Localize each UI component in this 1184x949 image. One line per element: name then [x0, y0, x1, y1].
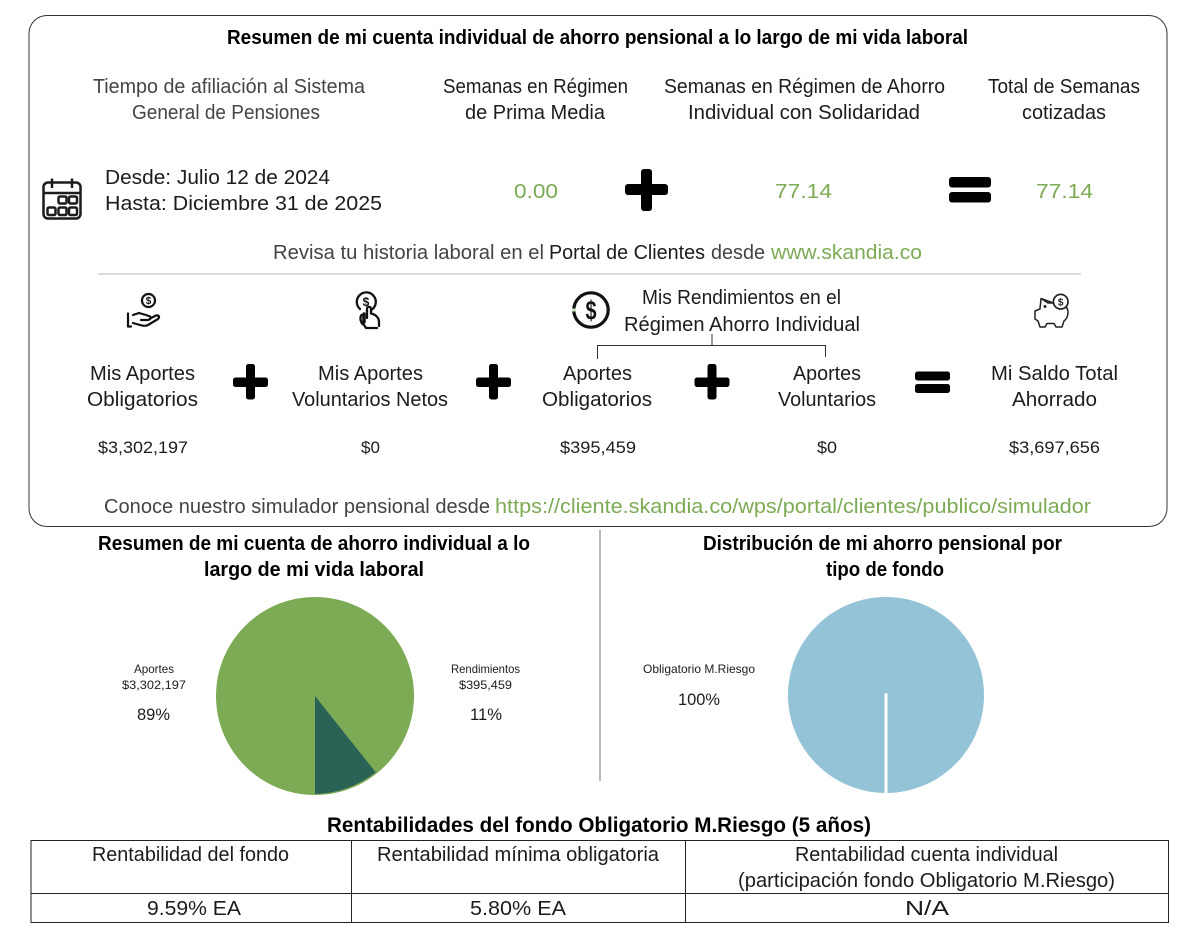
label: contributions [122, 662, 186, 724]
cell: individual account return: Rentabilidad cuenta individual [795, 844, 1058, 866]
text: individual savings weeks label: Semanas en Régimen de Ahorro [664, 76, 945, 98]
label: obligatory fund [643, 662, 755, 709]
column: returns on obligatory contributions: $395,459 [560, 438, 636, 457]
label: obligatory fund: 100% [678, 690, 720, 709]
heading: account summary: Resumen de mi cuenta individual de ahorro pensional a lo largo de mi vida laboral [227, 27, 968, 49]
heading: fund distribution: tipo de fondo [826, 559, 944, 581]
column: voluntary net contributions [292, 363, 448, 457]
heading: fund returns: Rentabilidades del fondo Obligatorio M.Riesgo (5 años) [327, 814, 871, 837]
text: affiliation dates: Desde: Julio 12 de 2024 [105, 167, 330, 189]
panel: fund distribution pie chart [643, 533, 1062, 794]
icon: finger with coin: $ [363, 295, 370, 309]
icon: plus [694, 364, 730, 400]
value: total weeks: 77.14 [1036, 181, 1093, 203]
column: total savings [991, 363, 1118, 457]
value: prima media weeks: 0.00 [514, 181, 558, 203]
cell: individual account return [738, 844, 1115, 920]
column: obligatory contributions: Obligatorios [87, 389, 198, 411]
text: affiliation time label: General de Pensiones [132, 102, 320, 124]
icon: plus [476, 364, 511, 400]
label: contributions: $3,302,197 [122, 678, 186, 692]
text: total weeks label [988, 76, 1140, 124]
column: returns on obligatory contributions: Obligatorios [542, 389, 652, 411]
icon: dollar circle [572, 293, 608, 327]
icon: calendar [44, 178, 80, 218]
icon: piggy bank [1035, 294, 1068, 327]
column: obligatory contributions: Mis Aportes [90, 363, 195, 385]
column: returns on voluntary contributions: Voluntarios [778, 389, 876, 411]
text: returns heading: Régimen Ahorro Individual [624, 314, 860, 336]
text: total weeks label: Total de Semanas [988, 76, 1140, 98]
text: simulator note: https://cliente.skandia.co/wps/portal/clientes/publico/simulador [495, 496, 1091, 518]
icon: hand with coin: $ [146, 296, 152, 307]
column: voluntary net contributions: Voluntarios Netos [292, 389, 448, 411]
text: client portal note [273, 242, 922, 264]
column: total savings: Ahorrado [1012, 389, 1097, 411]
value: individual savings weeks: 77.14 [775, 181, 832, 203]
text: affiliation time label [93, 76, 366, 124]
icon: hand with coin [128, 294, 159, 326]
text: simulator note: Conoce nuestro simulador pensional desde [104, 496, 490, 518]
panel: savings pie chart [98, 533, 530, 795]
heading: fund distribution: Distribución de mi ahorro pensional por [703, 533, 1062, 555]
text: total weeks label: cotizadas [1022, 102, 1106, 124]
heading: fund distribution [703, 533, 1062, 581]
cell: fund return [92, 844, 289, 920]
cell: fund return: 9.59% EA [147, 898, 242, 920]
column: voluntary net contributions: $0 [361, 438, 380, 457]
column: voluntary net contributions: Mis Aportes [318, 363, 423, 385]
text: simulator note [104, 496, 1091, 518]
text: client portal note: Revisa tu historia laboral en el [273, 242, 544, 264]
column: returns on voluntary contributions: Aportes [793, 363, 861, 385]
column: total savings: Mi Saldo Total [991, 363, 1118, 385]
icon: dollar circle: $ [586, 296, 596, 326]
heading: savings summary [98, 533, 530, 581]
pie chart: fund type [788, 597, 984, 794]
column: returns on voluntary contributions: $0 [817, 438, 837, 457]
icon: equals [949, 177, 991, 202]
icon: equals [915, 372, 950, 393]
bracket connector [598, 334, 826, 359]
text: client portal note: desde [711, 242, 765, 264]
cell: fund return: Rentabilidad del fondo [92, 844, 289, 866]
text: affiliation time label: Tiempo de afiliación al Sistema [93, 76, 366, 98]
text: returns heading [624, 287, 860, 336]
text: client portal note: Portal de Clientes [549, 242, 705, 264]
cell: minimum required return [377, 844, 660, 920]
label: contributions: 89% [137, 705, 170, 724]
icon: piggy bank: $ [1058, 298, 1064, 308]
text: affiliation dates: Hasta: Diciembre 31 de 2025 [105, 193, 382, 215]
text: individual savings weeks label [664, 76, 945, 124]
label: returns: $395,459 [459, 678, 512, 692]
column: returns on obligatory contributions: Aportes [563, 363, 632, 385]
icon: plus [625, 169, 668, 211]
heading: savings summary: Resumen de mi cuenta de ahorro individual a lo [98, 533, 530, 555]
column: obligatory contributions: $3,302,197 [98, 438, 188, 457]
text: client portal note: www.skandia.co [770, 242, 922, 264]
cell: minimum required return: Rentabilidad mínima obligatoria [377, 844, 660, 866]
text: returns heading: Mis Rendimientos en el [642, 287, 841, 309]
pie chart: contributions and returns [216, 597, 414, 795]
text: individual savings weeks label: Individual con Solidaridad [688, 102, 920, 124]
table: fund returns [31, 840, 1168, 922]
icon: plus [233, 364, 268, 400]
text: prima media weeks label: Semanas en Régimen [443, 76, 628, 98]
label: returns: Rendimientos [451, 662, 520, 676]
label: returns [451, 662, 520, 724]
label: contributions: Aportes [134, 662, 174, 676]
column: obligatory contributions [87, 363, 198, 457]
cell: individual account return: N/A [905, 898, 950, 920]
text: prima media weeks label [443, 76, 628, 124]
text: prima media weeks label: de Prima Media [465, 102, 606, 124]
column: returns on obligatory contributions [542, 363, 652, 457]
text: affiliation dates [105, 167, 382, 215]
label: obligatory fund: Obligatorio M.Riesgo [643, 662, 755, 676]
label: returns: 11% [470, 705, 502, 724]
heading: savings summary: largo de mi vida laboral [204, 559, 424, 581]
column: total savings: $3,697,656 [1009, 438, 1100, 457]
icon: finger with coin [357, 292, 379, 328]
panel: account summary [29, 16, 1167, 526]
cell: minimum required return: 5.80% EA [470, 898, 567, 920]
cell: individual account return: (participación fondo Obligatorio M.Riesgo) [738, 870, 1115, 892]
column: returns on voluntary contributions [778, 363, 876, 457]
